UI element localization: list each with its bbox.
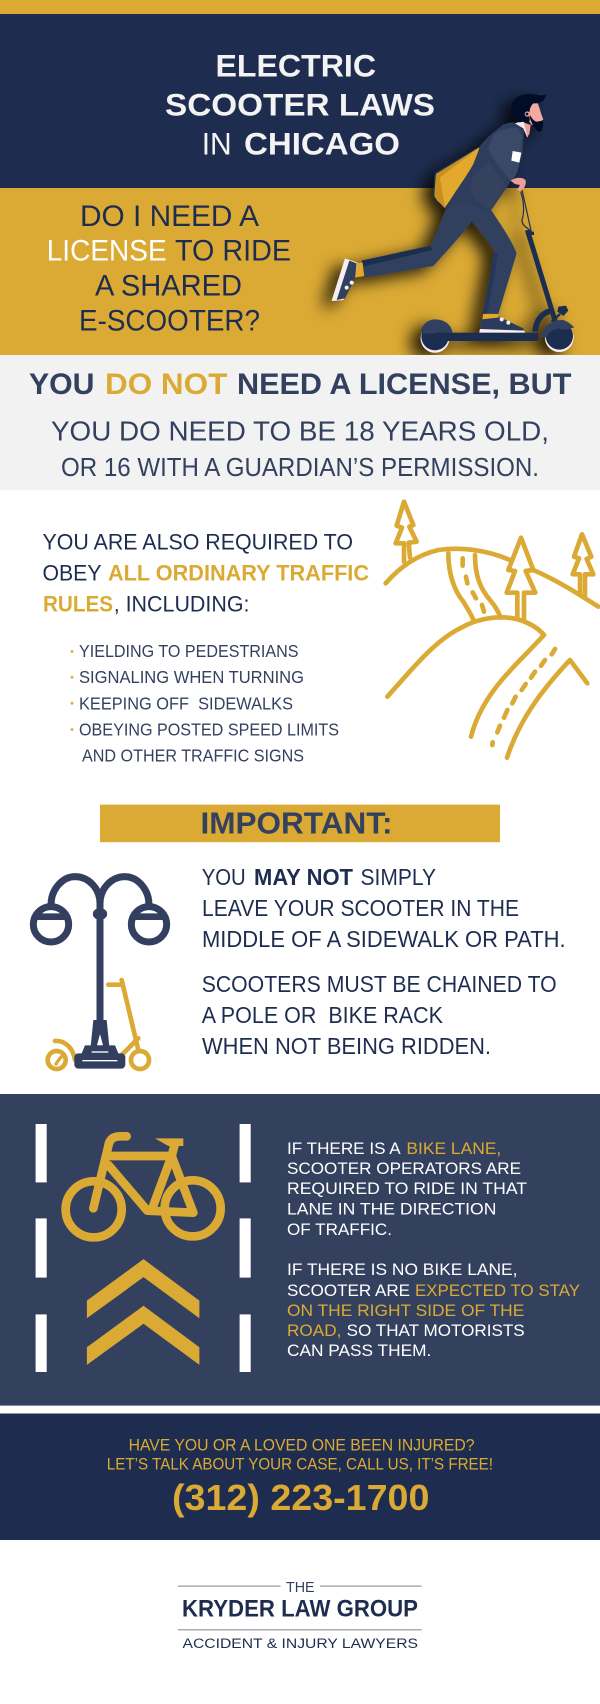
logo: The Kryder Law Group: ACCIDENT & INJURY LAWYERS xyxy=(182,1636,418,1652)
important body text: MIDDLE OF A SIDEWALK OR PATH. xyxy=(202,926,566,952)
important body text: SIMPLY xyxy=(360,864,436,890)
bullet list of traffic rules: KEEPING OFF SIDEWALKS xyxy=(79,693,293,713)
bullet list of traffic rules: YIELDING TO PEDESTRIANS xyxy=(79,641,299,661)
bike lane text: ON THE RIGHT SIDE OF THE xyxy=(287,1301,524,1320)
important body text: WHEN NOT BEING RIDDEN. xyxy=(202,1033,491,1059)
traffic rules intro text: , INCLUDING: xyxy=(114,591,250,616)
road lane dashes xyxy=(36,1124,251,1372)
bike lane text: LANE IN THE DIRECTION xyxy=(287,1200,496,1218)
panel: call to action: (312) 223-1700 xyxy=(172,1477,429,1518)
panel: bike lane xyxy=(0,1094,600,1406)
question text: A SHARED xyxy=(95,270,242,303)
question text: DO I NEED A xyxy=(80,200,259,233)
head xyxy=(511,94,546,138)
question text xyxy=(47,200,291,338)
answer subtext: YOU DO NEED TO BE 18 YEARS OLD, xyxy=(51,416,549,447)
bullet list of traffic rules xyxy=(71,641,339,765)
important body text: YOU xyxy=(202,864,246,890)
scooter stem xyxy=(521,190,568,332)
title: CHICAGO xyxy=(244,125,400,161)
bullet list of traffic rules: AND OTHER TRAFFIC SIGNS xyxy=(82,745,304,765)
important body text: LEAVE YOUR SCOOTER IN THE xyxy=(202,895,519,921)
important banner: IMPORTANT: xyxy=(200,806,392,841)
header panel: navy xyxy=(0,14,600,188)
bike lane text xyxy=(287,1139,580,1360)
traffic rules intro text: ALL ORDINARY TRAFFIC xyxy=(108,560,369,585)
traffic rules intro text: YOU ARE ALSO REQUIRED TO xyxy=(42,529,353,554)
panel: call to action xyxy=(0,1414,600,1540)
scooter deck and wheels xyxy=(421,319,574,353)
scooter outline xyxy=(48,980,149,1069)
bike lane text: OF TRAFFIC. xyxy=(287,1220,392,1239)
bullet list of traffic rules: OBEYING POSTED SPEED LIMITS xyxy=(79,719,339,739)
answer headline: YOU xyxy=(29,368,94,401)
backpack xyxy=(433,146,480,210)
title xyxy=(165,48,435,161)
answer headline: DO NOT xyxy=(105,368,227,401)
bike lane text: CAN PASS THEM. xyxy=(287,1341,431,1360)
icon: hills, road and trees xyxy=(386,502,598,758)
illustration: man riding scooter xyxy=(332,94,574,353)
hand xyxy=(511,178,526,191)
bike lane text: SCOOTER ARE xyxy=(287,1281,410,1300)
question text: E-SCOOTER? xyxy=(79,305,260,338)
bike lane text: ROAD, xyxy=(287,1321,341,1340)
lamp base xyxy=(74,1020,125,1069)
answer subtext: OR 16 WITH A GUARDIAN’S PERMISSION. xyxy=(61,454,539,482)
important banner xyxy=(100,805,500,842)
front shoe xyxy=(479,314,525,333)
important body text: A POLE OR BIKE RACK xyxy=(202,1002,444,1028)
bike lane text: SO THAT MOTORISTS xyxy=(347,1321,525,1340)
rear leg xyxy=(362,200,480,278)
bike lane text: EXPECTED TO STAY xyxy=(415,1281,580,1300)
important body text: SCOOTERS MUST BE CHAINED TO xyxy=(202,971,557,997)
traffic rules intro text xyxy=(42,529,369,616)
top gold strip xyxy=(0,0,600,14)
rear shoe xyxy=(332,258,364,301)
title: SCOOTER LAWS xyxy=(165,86,435,122)
icon: street lamp and parked scooter xyxy=(33,877,167,1069)
answer panel: light grey xyxy=(0,355,600,490)
icon: lane chevrons xyxy=(87,1259,199,1365)
logo: The Kryder Law Group: THE xyxy=(286,1580,315,1596)
important body text xyxy=(202,864,566,1059)
question panel: gold xyxy=(0,188,600,355)
lamp post xyxy=(33,877,167,1027)
bike lane text: SCOOTER OPERATORS ARE xyxy=(287,1159,521,1178)
logo: The Kryder Law Group xyxy=(178,1580,422,1652)
panel: call to action: LET’S TALK ABOUT YOUR CASE, CALL US, IT’S FREE! xyxy=(107,1454,493,1474)
answer headline: NEED A LICENSE, BUT xyxy=(237,368,571,401)
bike lane text: IF THERE IS A xyxy=(287,1139,401,1158)
front leg xyxy=(463,200,517,314)
question text: TO RIDE xyxy=(175,235,291,268)
traffic rules intro text: OBEY xyxy=(42,560,102,585)
panel: call to action: HAVE YOU OR A LOVED ONE BEEN INJURED? xyxy=(129,1435,474,1454)
bike lane text: BIKE LANE, xyxy=(406,1139,501,1158)
title: ELECTRIC xyxy=(216,48,376,84)
traffic rules intro text: RULES xyxy=(43,591,113,616)
icon: bicycle xyxy=(66,1136,221,1237)
title: IN xyxy=(202,125,232,161)
important body text: MAY NOT xyxy=(254,864,353,890)
answer subtext xyxy=(51,416,549,482)
logo: The Kryder Law Group: KRYDER LAW GROUP xyxy=(182,1596,418,1623)
bullet list of traffic rules: SIGNALING WHEN TURNING xyxy=(79,667,304,687)
jacket xyxy=(445,123,524,211)
bike lane text: IF THERE IS NO BIKE LANE, xyxy=(287,1260,517,1279)
bike lane text: REQUIRED TO RIDE IN THAT xyxy=(287,1179,527,1198)
question text: LICENSE xyxy=(47,235,167,268)
answer headline xyxy=(29,368,571,401)
